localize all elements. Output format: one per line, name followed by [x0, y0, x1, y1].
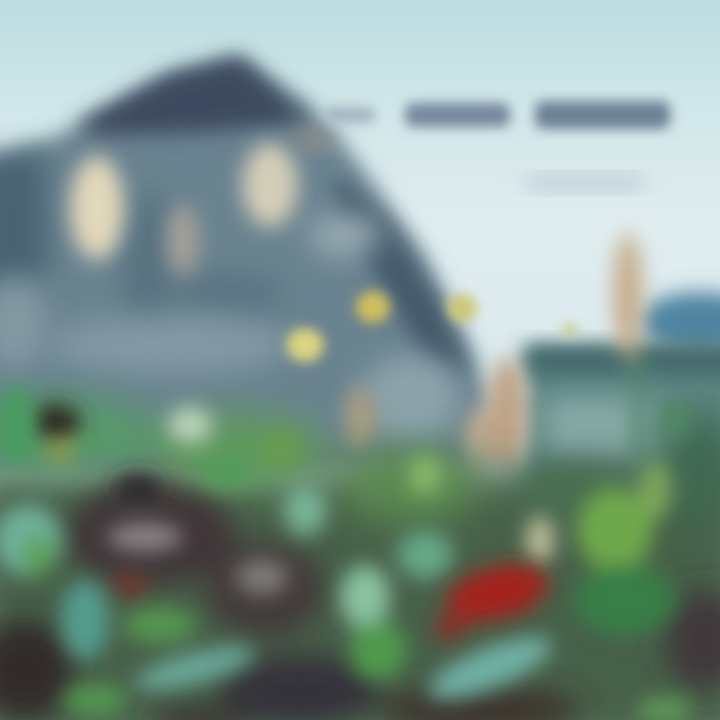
background reeds	[345, 233, 644, 473]
dark soil patches	[0, 485, 720, 720]
blurred heading	[325, 101, 670, 129]
distant hills and lake	[525, 292, 720, 490]
blurred subheading	[525, 176, 645, 190]
yellow flowers	[286, 291, 580, 362]
foliage mid band	[0, 397, 720, 530]
leaves	[0, 385, 693, 720]
foreground base	[0, 470, 720, 720]
sky	[0, 0, 720, 400]
red flower	[434, 554, 554, 639]
rock highlights	[70, 130, 337, 276]
soil details	[29, 404, 288, 597]
mountain	[0, 55, 490, 470]
